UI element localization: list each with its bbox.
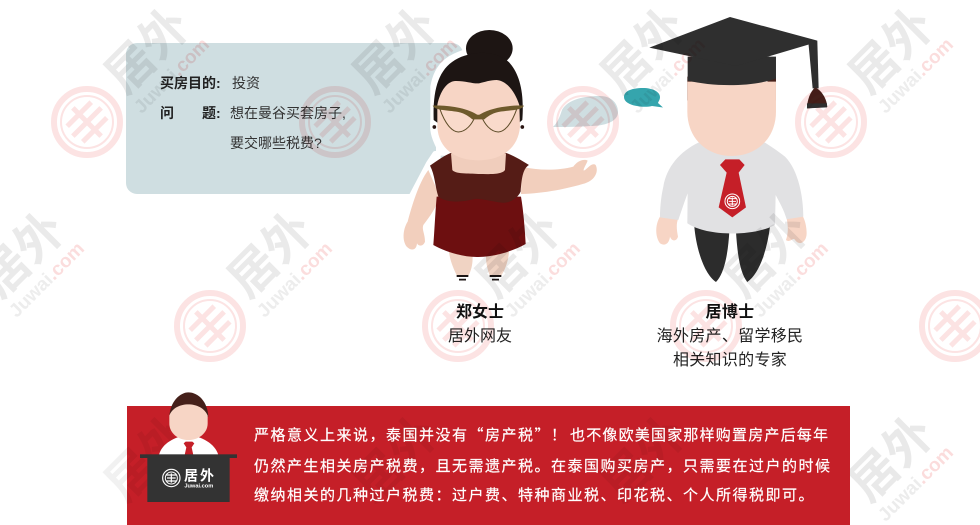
mortarboard xyxy=(688,57,776,85)
caption: Dr Ju: 居博士 xyxy=(706,302,754,321)
arms and hands xyxy=(656,216,807,245)
watermark pattern xyxy=(0,0,980,359)
podium xyxy=(140,454,237,458)
question text: 买房目的: xyxy=(160,75,221,91)
bun xyxy=(466,30,513,67)
question text: 问 xyxy=(160,105,174,121)
icon: speech bubble light xyxy=(553,96,618,127)
watermark row 1: Juwai.com xyxy=(130,34,214,118)
shirt xyxy=(660,143,803,234)
question text: 投资 xyxy=(232,75,260,91)
caption: Ms Zheng: 郑女士 xyxy=(456,302,504,321)
logo: 居外 xyxy=(184,468,216,484)
panel: answer band xyxy=(95,406,850,525)
hair sides xyxy=(687,77,776,101)
watermark row 1: Juwai.com xyxy=(874,34,958,118)
watermark row 2: Juwai.com xyxy=(5,238,89,322)
figure: Ms Zheng xyxy=(404,30,597,280)
watermark row 1: Juwai.com xyxy=(378,34,462,118)
watermark row 1: 居外 xyxy=(591,0,697,104)
right arm xyxy=(521,160,597,194)
watermark row 2: 居外 xyxy=(466,202,572,308)
earrings xyxy=(432,125,436,129)
white outline xyxy=(412,36,523,197)
hair xyxy=(434,53,523,123)
caption: Dr Ju: 相关知识的专家 xyxy=(673,351,787,369)
watermark row 2: Juwai.com xyxy=(749,238,833,322)
tassel xyxy=(808,41,819,88)
answer text: 也不像欧美国家那样购置房产后每年 xyxy=(570,424,829,445)
dress top xyxy=(430,153,529,203)
question text: 要交哪些税费? xyxy=(230,135,322,151)
figure: presenter at podium xyxy=(140,392,237,502)
watermark row 2: 居外 xyxy=(714,202,820,308)
watermark row 2: Juwai.com xyxy=(253,238,337,322)
answer text: 严格意义上来说，泰国并没有“房产税”！ xyxy=(254,424,568,445)
shoes xyxy=(457,273,501,279)
caption: Ms Zheng xyxy=(448,302,512,345)
watermark row 3: 居外 xyxy=(839,406,945,512)
watermark row 1: 居外 xyxy=(343,0,449,104)
figure: Dr Ju xyxy=(649,17,827,282)
logo: Juwai.com xyxy=(184,483,213,489)
faint watermark on band: 居外 xyxy=(95,406,201,512)
question text xyxy=(160,75,346,151)
face xyxy=(169,404,208,440)
watermark row 3: Juwai.com xyxy=(874,442,958,525)
hair xyxy=(169,392,208,417)
watermark row 1 xyxy=(54,0,958,155)
icon: tie logo xyxy=(725,194,740,209)
tie xyxy=(719,159,746,217)
question text: 题: xyxy=(202,105,221,121)
logo xyxy=(163,468,216,489)
watermark row 1: 居外 xyxy=(839,0,945,104)
watermark row 1: Juwai.com xyxy=(626,34,710,118)
faint watermark on band xyxy=(95,406,697,512)
glasses xyxy=(433,106,524,132)
watermark row 2: 居外 xyxy=(218,202,324,308)
icon: speech bubble teal xyxy=(624,88,663,108)
face xyxy=(687,82,776,156)
watermark row 2 xyxy=(0,202,980,359)
left arm xyxy=(404,170,440,250)
legs xyxy=(449,252,509,276)
caption: Dr Ju: 海外房产、留学移民 xyxy=(657,327,803,345)
answer text: 仍然产生相关房产税费，且无需遗产税。在泰国购买房产，只需要在过户的时候 xyxy=(254,455,832,476)
watermark row 2: Juwai.com xyxy=(501,238,585,322)
question text: 想在曼谷买套房子, xyxy=(230,105,346,121)
faint watermark on band: 居外 xyxy=(591,406,697,512)
caption: Ms Zheng: 居外网友 xyxy=(448,327,512,345)
neck xyxy=(451,153,506,174)
caption: Dr Ju xyxy=(657,302,803,369)
tie xyxy=(184,442,194,455)
face xyxy=(437,80,520,160)
faint watermark on band: 居外 xyxy=(343,406,449,512)
watermark row 1: 居外 xyxy=(95,0,201,104)
answer text xyxy=(254,424,832,505)
panel: question card xyxy=(126,43,463,194)
answer text: 缴纳相关的几种过户税费：过户费、特种商业税、印花税、个人所得税即可。 xyxy=(254,484,815,505)
shirt xyxy=(159,434,218,455)
dress lower xyxy=(433,197,526,257)
trousers xyxy=(694,227,770,282)
